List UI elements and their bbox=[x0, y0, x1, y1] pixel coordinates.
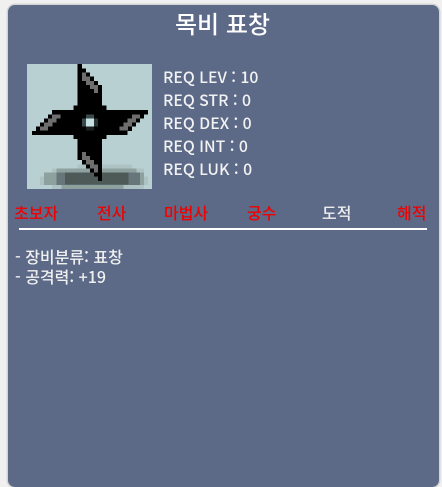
title: 목비 표창 bbox=[175, 5, 270, 40]
divider line bbox=[19, 228, 427, 230]
job: pirate: 해적 bbox=[397, 200, 426, 224]
req luk: REQ LUK : 0 bbox=[163, 157, 252, 180]
description: attack power: - 공격력: +19 bbox=[15, 264, 106, 288]
job: archer: 궁수 bbox=[247, 200, 276, 224]
job: warrior: 전사 bbox=[97, 200, 126, 224]
job: beginner: 초보자 bbox=[14, 200, 58, 224]
req str: REQ STR : 0 bbox=[163, 88, 251, 111]
req int: REQ INT : 0 bbox=[163, 134, 248, 157]
req level: REQ LEV : 10 bbox=[163, 65, 258, 88]
description: item category: - 장비분류: 표창 bbox=[15, 244, 123, 268]
job: magician: 마법사 bbox=[164, 200, 208, 224]
icon: throwing star bbox=[27, 64, 152, 189]
req dex: REQ DEX : 0 bbox=[163, 111, 252, 134]
job: thief: 도적 bbox=[322, 200, 351, 224]
